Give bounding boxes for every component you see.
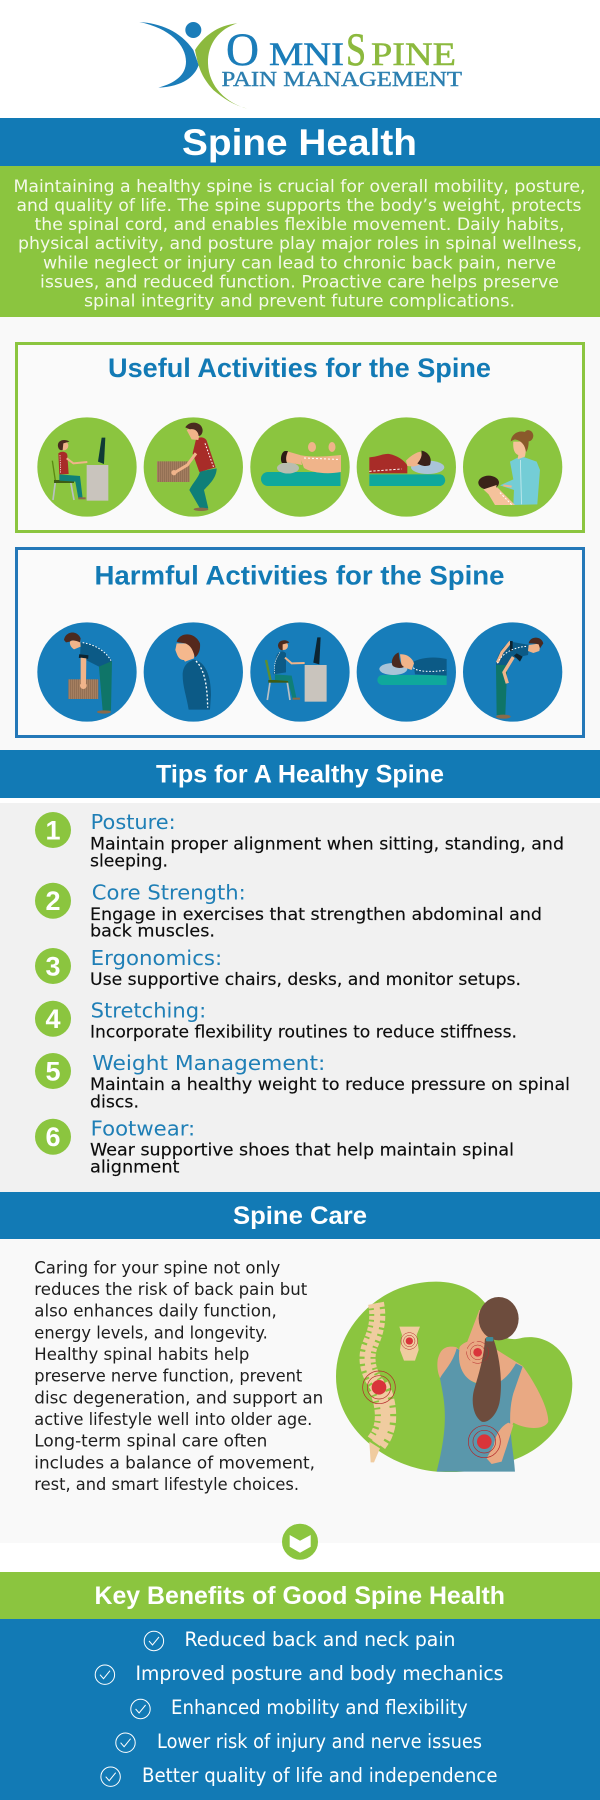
tip 2: core strength [35,881,542,941]
tip 2: core strength: Engage in exercises that strengthen abdominal and [90,905,542,924]
text block: spine care [34,1258,323,1495]
benefit 1: Reduced back and neck pain [184,1628,456,1651]
panel: useful activities [16,344,584,532]
icon: poor sleeping posture [357,622,456,722]
tip 5: weight management: discs. [90,1092,139,1111]
tip 6: footwear [35,1117,514,1177]
text block: spine care: active lifestyle well into older age. [34,1410,312,1430]
icon: slouched back posture [144,622,243,722]
icon: good sitting posture [37,417,137,517]
section header: key benefits [0,1572,600,1619]
intro panel: issues, and reduced function. Proactive care helps preserve [40,272,559,292]
logo: OmniSpine Pain Management [139,22,462,109]
panel: tips list [0,803,600,1192]
icon: therapist treating patient [463,417,562,517]
tip 4: stretching: Stretching: [91,999,206,1023]
icon: good lifting posture [144,417,243,517]
tip 1: posture: Posture: [91,810,176,834]
text block: spine care: reduces the risk of back pain but [34,1280,308,1300]
vertebra [399,1327,420,1361]
icon: bending forward posture [463,622,562,722]
benefit 2: Improved posture and body mechanics [136,1662,504,1685]
tip 3: ergonomics: 3 [45,952,61,982]
tip 3: ergonomics: Use supportive chairs, desks, and monitor setups. [90,970,521,989]
logo wordmark: PAIN MANAGEMENT [222,67,462,91]
text block: spine care: disc degeneration, and support an [34,1388,323,1408]
intro panel: while neglect or injury can lead to chronic back pain, nerve [43,253,556,273]
icon: lying on back with pillow [357,417,456,517]
text block: spine care: Caring for your spine not only [34,1258,280,1278]
logo wordmark: MNI [269,37,344,73]
benefit 3: Enhanced mobility and flexibility [171,1696,468,1719]
text block: spine care: preserve nerve function, prevent [34,1367,303,1387]
logo wordmark: O [226,24,259,76]
intro panel: Maintaining a healthy spine is crucial for overall mobility, posture, [14,177,586,197]
tip 6: footwear: alignment [90,1158,180,1177]
intro panel: the spinal cord, and enables flexible movement. Daily habits, [34,215,564,235]
header band: title: Spine Health [182,122,417,163]
tip 1: posture: 1 [45,816,61,846]
text block: spine care: energy levels, and longevity. [34,1323,268,1343]
intro panel: and quality of life. The spine supports the body’s weight, protects [16,196,582,216]
section header: spine care [0,1192,600,1239]
text block: spine care: also enhances daily function, [34,1302,277,1322]
tip 5: weight management: Weight Management: [92,1051,325,1075]
tip 5: weight management: Maintain a healthy weight to reduce pressure on spinal [90,1075,570,1094]
intro panel [0,166,600,317]
tip 6: footwear: Wear supportive shoes that help maintain spinal [90,1141,514,1160]
panel: harmful activities [16,548,584,736]
heading: harmful activities: Harmful Activities for the Spine [94,560,504,590]
illustration: spine and woman with back pain [336,1282,572,1472]
tip 2: core strength: Core Strength: [92,881,246,905]
section header: spine care: Spine Care [233,1202,367,1230]
text block: spine care: includes a balance of movement, [34,1453,315,1473]
logo wordmark: S [346,24,366,76]
icon: lying face down with massage [250,417,350,517]
tip 1: posture: sleeping. [90,852,168,871]
tip 4: stretching: Incorporate flexibility routines to reduce stiffness. [90,1022,517,1041]
tip 1: posture: Maintain proper alignment when sitting, standing, and [90,834,564,853]
benefit 4: Lower risk of injury and nerve issues [157,1730,482,1753]
text block: spine care: rest, and smart lifestyle choices. [34,1475,299,1495]
section header: tips [0,750,600,798]
section header: key benefits: Key Benefits of Good Spine Health [94,1582,505,1610]
intro panel: spinal integrity and prevent future complications. [84,292,515,312]
icon: bad lifting posture [37,622,137,722]
benefit 5: Better quality of life and independence [142,1764,498,1787]
tip 1: posture [35,810,564,871]
panel: benefits list [0,1619,600,1800]
woman [437,1297,548,1472]
heading: useful activities: Useful Activities for the Spine [108,353,491,383]
tip 4: stretching [35,999,517,1041]
intro panel: physical activity, and posture play major roles in spinal wellness, [18,234,582,254]
spine [363,1303,395,1462]
tip 2: core strength: back muscles. [90,922,215,941]
tip 4: stretching: 4 [45,1004,61,1034]
logo wordmark [222,24,462,91]
tip 5: weight management: 5 [45,1056,61,1086]
tip 6: footwear: 6 [45,1122,61,1152]
tip 6: footwear: Footwear: [91,1117,195,1141]
tip 2: core strength: 2 [45,886,61,916]
icon: down arrow circle [282,1524,318,1560]
green blob [336,1282,572,1472]
tip 5: weight management [35,1051,570,1111]
logo mark [139,22,247,109]
tip 3: ergonomics: Ergonomics: [91,946,222,970]
logo wordmark: PINE [371,37,456,73]
text block: spine care: Healthy spinal habits help [34,1345,249,1365]
icon: poor desk posture [250,622,350,722]
section header: tips: Tips for A Healthy Spine [156,760,444,788]
header band: title [0,118,600,166]
text block: spine care: Long-term spinal care often [34,1432,267,1452]
tip 3: ergonomics [35,946,521,989]
